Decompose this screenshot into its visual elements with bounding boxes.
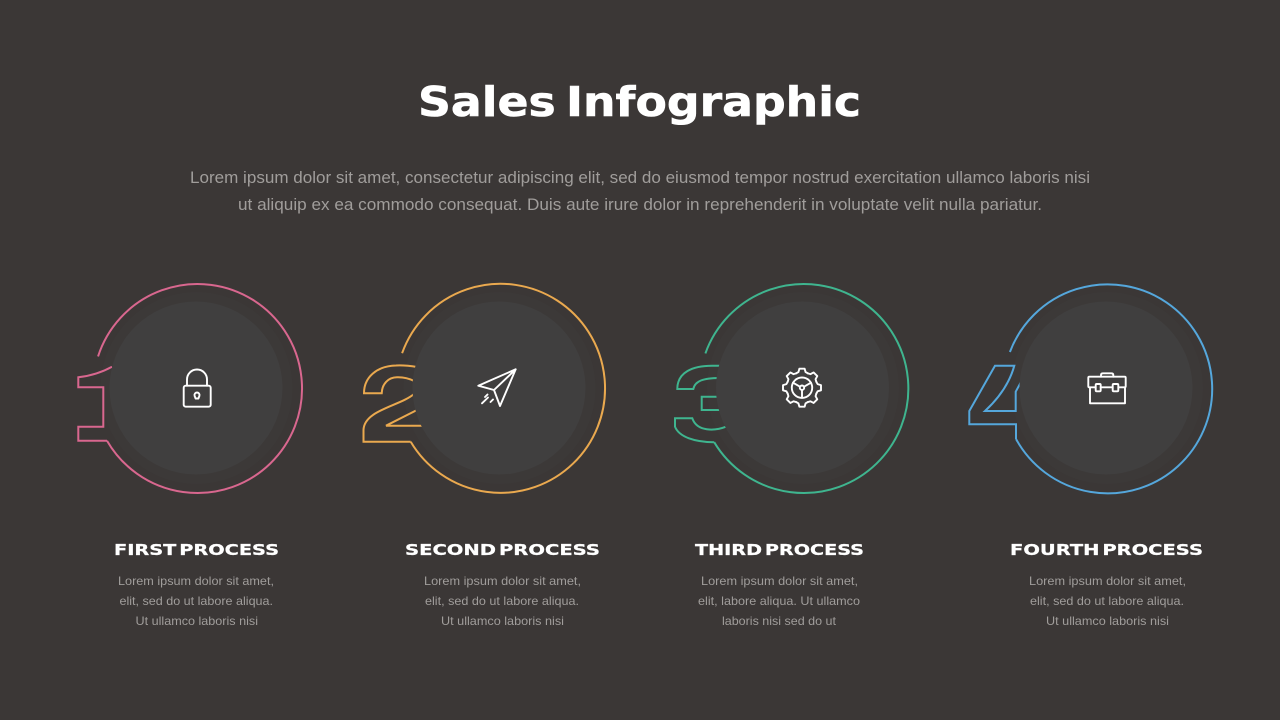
ring with numeral 1 outline <box>78 284 302 493</box>
panel: fourth process <box>969 284 1212 628</box>
ring with numeral 4 outline <box>969 284 1212 493</box>
intro text block: Lorem ipsum dolor sit amet, consectetur adipiscing elit, sed do eiusmod tempor nostrud exercitation ullamco laboris nisi <box>190 169 1090 187</box>
inner disc <box>1020 302 1192 474</box>
icon: gear with wheel <box>783 369 821 407</box>
intro text block <box>190 169 1090 214</box>
icon: padlock <box>184 370 211 407</box>
panel: first process <box>78 284 302 628</box>
description: fourth process: elit, sed do ut labore aliqua. <box>1030 594 1184 608</box>
heading: first process: FIRST PROCESS <box>114 541 279 559</box>
description: third process <box>698 574 860 628</box>
inner disc <box>716 302 889 474</box>
description: third process: elit, labore aliqua. Ut ullamco <box>698 594 860 608</box>
inner disc <box>412 302 586 474</box>
description: first process: elit, sed do ut labore aliqua. <box>120 594 273 608</box>
description: fourth process: Ut ullamco laboris nisi <box>1046 614 1169 628</box>
description: first process: Ut ullamco laboris nisi <box>136 614 258 628</box>
description: second process <box>424 574 581 628</box>
intro text block: ut aliquip ex ea commodo consequat. Duis aute irure dolor in reprehenderit in voluptate velit nulla pariatur. <box>238 196 1042 214</box>
description: second process: Lorem ipsum dolor sit amet, <box>424 574 581 588</box>
description: fourth process: Lorem ipsum dolor sit amet, <box>1029 574 1186 588</box>
description: fourth process <box>1029 574 1186 628</box>
description: first process: Lorem ipsum dolor sit amet, <box>118 574 274 588</box>
description: first process <box>118 574 274 628</box>
description: second process: Ut ullamco laboris nisi <box>441 614 564 628</box>
description: third process: laboris nisi sed do ut <box>722 614 837 628</box>
title: Sales Infographic <box>418 78 861 126</box>
description: third process: Lorem ipsum dolor sit amet, <box>701 574 858 588</box>
panel: third process <box>675 284 908 628</box>
description: second process: elit, sed do ut labore aliqua. <box>425 594 579 608</box>
inner disc <box>110 302 282 474</box>
heading: fourth process: FOURTH PROCESS <box>1010 541 1203 559</box>
ring with numeral 2 outline <box>364 284 605 493</box>
icon: paper plane <box>478 369 516 406</box>
panel: second process <box>364 284 605 628</box>
heading: third process: THIRD PROCESS <box>695 541 864 559</box>
heading: second process: SECOND PROCESS <box>405 541 600 559</box>
icon: briefcase <box>1088 373 1126 403</box>
ring with numeral 3 outline <box>675 284 908 493</box>
